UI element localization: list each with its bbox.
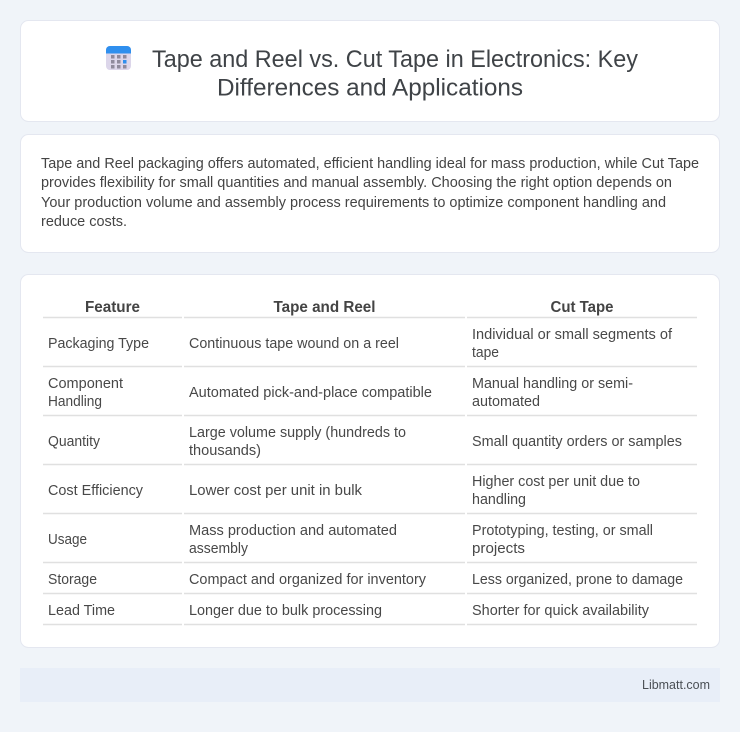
row: packaging type [48, 326, 673, 361]
row: usage [48, 522, 653, 557]
row: component handling: Component [48, 375, 124, 392]
intro paragraph: Tape and Reel packaging offers automated, efficient handling ideal for mass production, while Cut Tape [41, 155, 699, 172]
row: packaging type: Continuous tape wound on a reel [189, 335, 399, 352]
row: storage: Compact and organized for inventory [189, 571, 426, 588]
title [152, 46, 639, 102]
footer [20, 668, 720, 702]
title: Tape and Reel vs. Cut Tape in Electronics: Key [152, 46, 639, 73]
row: packaging type: Packaging Type [48, 335, 149, 352]
row: lead time: Lead Time [48, 602, 115, 619]
intro paragraph: Your production volume and assembly process requirements to optimize component handling and [41, 194, 666, 211]
row: usage: Mass production and automated [189, 522, 397, 539]
row: usage: Usage [48, 531, 87, 548]
panel: intro text [20, 134, 720, 252]
row: cost efficiency: handling [472, 491, 526, 508]
table header: Tape and Reel [274, 299, 376, 316]
row: storage: Less organized, prone to damage [472, 571, 683, 588]
table header: Cut Tape [550, 299, 614, 316]
row: quantity: Large volume supply (hundreds to [189, 424, 406, 441]
panel: header [20, 20, 720, 122]
row: quantity [48, 424, 682, 459]
row: quantity: Quantity [48, 433, 100, 450]
intro paragraph: provides flexibility for small quantities and manual assembly. Choosing the right option depends on [41, 174, 672, 191]
row: usage: Prototyping, testing, or small [472, 522, 653, 539]
row: lead time: Shorter for quick availability [472, 602, 649, 619]
row: component handling: Manual handling or semi- [472, 375, 633, 392]
row: quantity: Small quantity orders or samples [472, 433, 682, 450]
panel: comparison table [20, 274, 720, 648]
row: cost efficiency: Higher cost per unit due to [472, 473, 640, 490]
intro paragraph [41, 155, 699, 230]
row: cost efficiency [48, 473, 640, 508]
row: component handling: Automated pick-and-place compatible [189, 384, 432, 401]
row: storage [48, 571, 683, 588]
row: packaging type: Individual or small segments of [472, 326, 673, 343]
row: cost efficiency: Lower cost per unit in bulk [189, 482, 362, 499]
row: component handling [48, 375, 633, 410]
intro paragraph: reduce costs. [41, 213, 127, 230]
table header [85, 299, 614, 316]
row: quantity: thousands) [189, 442, 261, 459]
row: component handling: Handling [48, 393, 102, 410]
title: Differences and Applications [217, 74, 523, 102]
row: packaging type: tape [472, 344, 499, 361]
row: lead time [48, 602, 649, 619]
row: lead time: Longer due to bulk processing [189, 602, 382, 619]
row: cost efficiency: Cost Efficiency [48, 482, 143, 499]
row: usage: projects [472, 540, 525, 557]
row: usage: assembly [189, 540, 248, 557]
row: storage: Storage [48, 571, 97, 588]
icon: calendar [106, 46, 131, 70]
footer credit: Libmatt.com [642, 677, 710, 692]
row: component handling: automated [472, 393, 540, 410]
table header: Feature [85, 299, 140, 316]
